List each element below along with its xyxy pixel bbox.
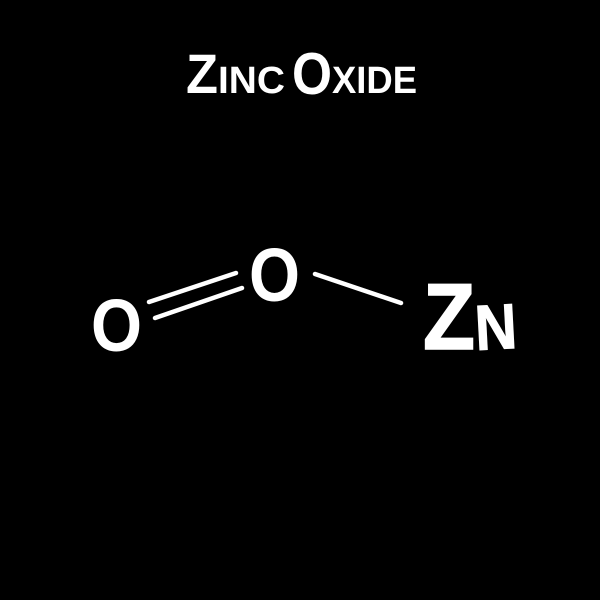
title: O	[292, 41, 332, 107]
single bond	[315, 274, 401, 303]
atom: left oxygen: O	[91, 284, 142, 367]
atom: zinc	[423, 264, 519, 369]
title: XIDE	[332, 60, 417, 102]
title	[186, 41, 417, 107]
title: INC	[218, 60, 285, 102]
atom: central oxygen: O	[249, 233, 300, 317]
atom: zinc: Z	[423, 264, 475, 369]
title: Z	[186, 42, 218, 105]
double bond	[149, 273, 242, 318]
atom: zinc: N	[473, 290, 519, 364]
